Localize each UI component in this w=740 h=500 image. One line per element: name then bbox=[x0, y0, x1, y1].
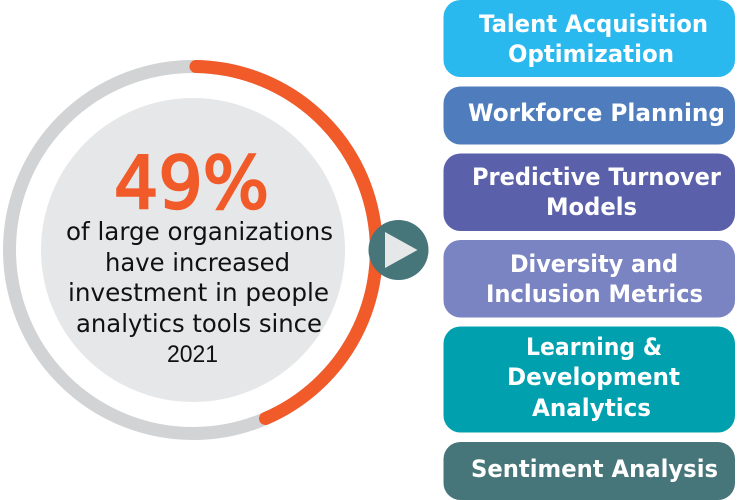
panel: learning and development analytics: Analytics bbox=[532, 394, 651, 422]
panel: learning and development analytics: Learning & bbox=[526, 333, 662, 361]
panel: predictive turnover models bbox=[444, 154, 735, 231]
panel: sentiment analysis: Sentiment Analysis bbox=[471, 455, 718, 483]
panel: predictive turnover models: Predictive Turnover bbox=[472, 163, 721, 191]
panel: sentiment analysis bbox=[444, 442, 735, 500]
statistic description: of large organizations bbox=[66, 217, 333, 246]
icon: play arrow bbox=[368, 220, 428, 280]
panel: predictive turnover models: Models bbox=[546, 193, 637, 221]
panel: learning and development analytics bbox=[444, 326, 735, 432]
big number: 49% bbox=[114, 141, 269, 225]
statistic description: analytics tools since bbox=[76, 309, 322, 338]
progress ring arc: 49% bbox=[196, 66, 376, 418]
panel: diversity and inclusion metrics bbox=[444, 240, 735, 318]
panel: workforce planning bbox=[444, 86, 735, 144]
panel: learning and development analytics: Development bbox=[507, 363, 680, 391]
panel: statistic circle bbox=[10, 66, 376, 434]
panel: diversity and inclusion metrics: Inclusion Metrics bbox=[486, 280, 703, 308]
statistic description: investment in people bbox=[68, 278, 329, 307]
panel: diversity and inclusion metrics: Diversity and bbox=[510, 250, 678, 278]
panel: talent acquisition optimization bbox=[444, 0, 735, 77]
statistic description: 2021 bbox=[167, 341, 218, 368]
statistic description bbox=[66, 217, 333, 368]
progress ring track bbox=[10, 66, 376, 434]
panel: talent acquisition optimization: Talent Acquisition bbox=[479, 10, 708, 38]
panel: talent acquisition optimization: Optimization bbox=[508, 40, 674, 68]
inner grey disc bbox=[41, 98, 345, 402]
panel: workforce planning: Workforce Planning bbox=[468, 99, 725, 127]
statistic description: have increased bbox=[105, 248, 290, 277]
